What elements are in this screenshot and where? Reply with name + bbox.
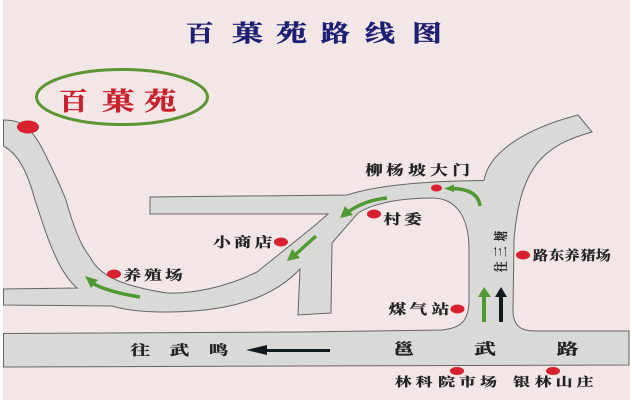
- marker: 百菓苑 location: [17, 120, 39, 134]
- title: 图: [412, 20, 442, 46]
- label: 银林山庄: 银林山庄: [513, 374, 594, 389]
- logo: 百菓苑 oval: 苑: [144, 88, 177, 116]
- arrow: green up: [478, 287, 491, 322]
- title: 路: [321, 21, 350, 46]
- marker: 林科院市场: [450, 367, 464, 375]
- marker: 煤气站: [450, 304, 464, 314]
- label: 小商店: 小商店: [213, 235, 273, 250]
- label: 路东养猪场: 路东养猪场: [533, 248, 611, 264]
- logo: 百菓苑 oval: 百: [59, 88, 88, 116]
- road network: [4, 115, 629, 367]
- title: 菓: [232, 21, 263, 46]
- label: 柳杨坡大门: 柳杨坡大门: [365, 162, 470, 178]
- label: 养殖场: 养殖场: [123, 267, 183, 283]
- label: 煤气站: 煤气站: [388, 301, 450, 317]
- label: 往武鸣: 往武鸣: [131, 342, 229, 358]
- arrow: black up: [495, 287, 507, 322]
- arrow: green route 2: [340, 198, 387, 218]
- label: 林科院市场: 林科院市场: [395, 374, 497, 389]
- label: 往三塘 (rotated): 往三塘: [492, 230, 509, 272]
- title: 百: [186, 21, 214, 46]
- arrow: green route 1: [444, 184, 480, 206]
- arrow: green route 3: [287, 236, 316, 261]
- arrow: black left: [246, 345, 330, 355]
- marker: 小商店: [274, 238, 288, 246]
- title: 线: [365, 20, 395, 46]
- logo: 百菓苑 oval: 菓: [102, 88, 135, 116]
- title: 苑: [276, 21, 307, 46]
- marker: 银林山庄: [546, 367, 560, 375]
- marker: 村委: [367, 210, 381, 218]
- marker: 养殖场: [107, 270, 121, 278]
- logo: 百菓苑 oval: [36, 70, 208, 124]
- arrow: green route 4: [85, 276, 140, 297]
- marker: 路东养猪场: [516, 250, 530, 260]
- marker: 柳杨坡大门: [431, 184, 442, 192]
- label: 邕武路: 邕武路: [393, 341, 579, 358]
- label: 村委: 村委: [383, 211, 423, 227]
- title: [186, 20, 442, 46]
